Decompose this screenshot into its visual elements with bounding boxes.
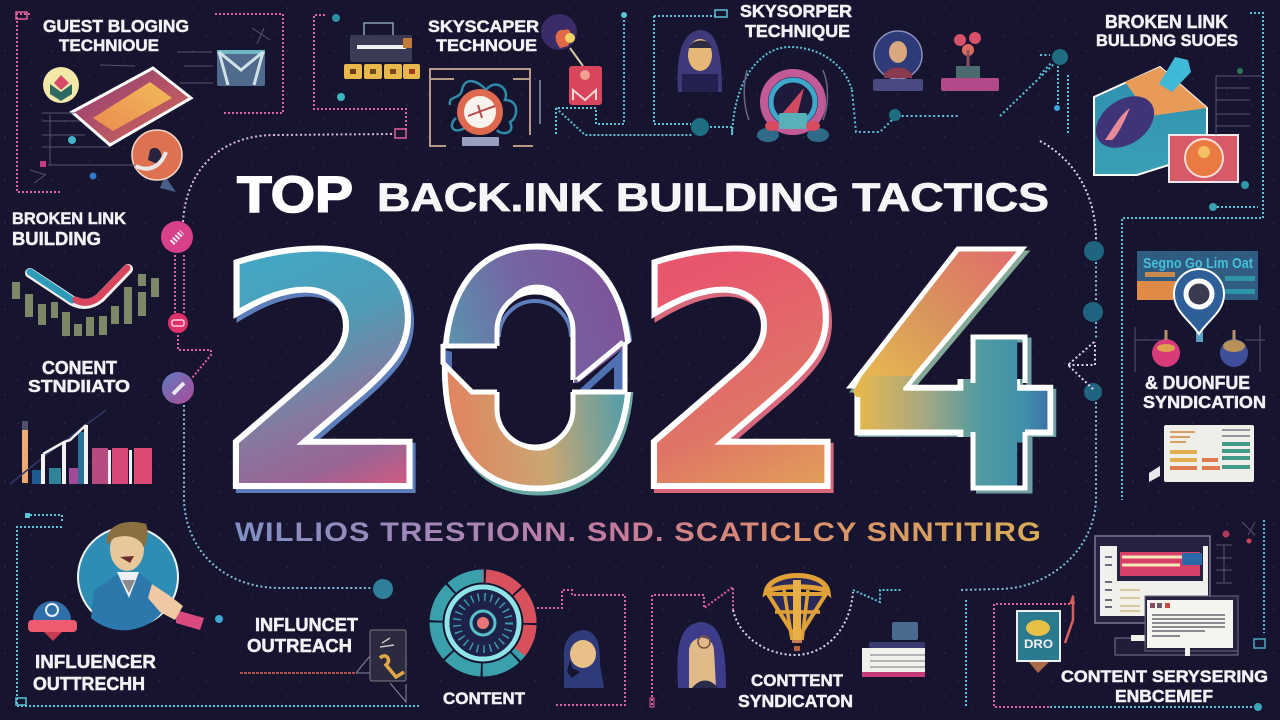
icon: front monitor — [1115, 596, 1238, 656]
bracket line — [1122, 13, 1263, 500]
heading: broken link building suoes: BULLDNG SUOES — [1096, 32, 1238, 50]
heading: conent stndiiato — [28, 358, 130, 396]
small node markers — [40, 14, 345, 180]
node: pink circles — [161, 221, 211, 378]
bracket line — [537, 590, 625, 705]
swoosh line — [30, 268, 128, 304]
icon: gauge — [744, 70, 829, 142]
heading: skysorper technique: SKYSORPER — [740, 1, 852, 21]
icon: sign board: Segno Go Lim Oat — [1143, 255, 1253, 272]
heading: conttent syndicaton: CONTTENT — [751, 671, 844, 690]
digit 2: 2 — [213, 194, 441, 566]
icon: typewriter — [344, 23, 420, 79]
bracket line to frame — [314, 15, 406, 138]
icon: 3D box — [1086, 57, 1207, 175]
icon: hand and cuff — [148, 584, 223, 630]
digit 4 — [846, 246, 1056, 494]
icon: envelope — [217, 50, 265, 86]
bar chart — [10, 410, 152, 484]
icon: two ornaments — [1152, 330, 1248, 367]
digit 4: 4 — [843, 173, 1065, 554]
panel: skysorper technique — [678, 1, 999, 142]
heading: skysorper technique: TECHNIQUE — [745, 21, 850, 41]
icon: magnifier circle — [132, 130, 182, 192]
candle bars — [12, 274, 159, 336]
heading: duonfue syndication — [1143, 373, 1266, 412]
icon: sign board — [1137, 251, 1258, 300]
heading: broken link building suoes: BROKEN LINK — [1105, 12, 1228, 32]
icon: location pin — [1174, 269, 1224, 342]
icon: red badge tile — [1169, 135, 1238, 182]
heading: broken link building: BUILDING — [12, 229, 101, 249]
heading: conent stndiiato: CONENT — [42, 358, 117, 378]
panel: syndication right — [1135, 251, 1266, 482]
icon: orb and picture tile — [541, 14, 602, 105]
guest blogging bracket lines — [16, 12, 283, 192]
panel: content serysering — [966, 520, 1268, 711]
node: purple circle — [162, 372, 194, 404]
heading: guest blogging technique: GUEST BLOGING — [43, 16, 189, 36]
icon: golden balloon — [766, 576, 828, 651]
heading: skyscaper technoue — [428, 17, 539, 55]
heading: guest blogging technique — [43, 16, 189, 55]
panel: influencer outreach — [16, 513, 420, 706]
panel: broken link building suoes — [1086, 12, 1263, 500]
digit 4: 4 — [846, 177, 1068, 558]
icon: potted plant — [941, 32, 999, 91]
small marks — [1216, 522, 1255, 583]
icon: woman portrait — [564, 630, 604, 688]
digit 2 red: 2 — [628, 190, 856, 562]
heading: influencer outtrech — [33, 651, 156, 694]
panel: content syndication bottom — [650, 576, 925, 711]
panel: content wheel — [436, 576, 625, 708]
icon: location badge — [28, 601, 77, 641]
subtitle: WILLIOS TRESTIONN. SND. SCATICLCY SNNTITIRG — [235, 517, 1042, 547]
title word: TOP: TOP — [237, 166, 353, 223]
icon: back monitor — [1095, 536, 1210, 623]
heading: conttent syndicaton — [738, 671, 853, 711]
icon: avatar — [78, 522, 178, 630]
icon: framed network globe — [430, 69, 540, 146]
heading: duonfue syndication: SYNDICATION — [1143, 392, 1266, 412]
heading: broken link building — [12, 209, 127, 249]
panel: skyscaper technique — [314, 14, 602, 146]
heading: broken link building suoes — [1096, 12, 1238, 50]
connector nodes right — [1040, 49, 1104, 401]
digit 0: 0 — [430, 188, 644, 560]
connector lines top centre — [556, 10, 1058, 136]
icon: DRO tile: DRO — [1024, 637, 1053, 651]
heading: influencer outtrech: INFLUENCER — [35, 651, 156, 672]
digit 0: 0 — [432, 192, 646, 564]
icon: DRO tile — [1017, 594, 1075, 673]
icon: tilted card — [72, 68, 191, 145]
panel: guest blogging — [16, 12, 345, 192]
digit 0: 0 — [432, 192, 646, 564]
node: teal circle — [373, 579, 393, 599]
bracket line — [16, 513, 420, 706]
heading: influncet outreach — [247, 614, 359, 656]
big year 2024 — [232, 244, 1056, 496]
icon: content wheel — [436, 576, 530, 670]
title words: backlink building tactics: BACK.INK BUILDING TACTICS — [377, 176, 1049, 220]
heading: skysorper technique — [740, 1, 852, 41]
central dashed frame — [183, 134, 1096, 590]
heading: influncet outreach: OUTREACH — [247, 635, 352, 656]
bracket lines — [966, 520, 1265, 711]
digit 0 — [440, 244, 634, 496]
heading: content: CONTENT — [443, 689, 526, 708]
heading: conttent syndicaton: SYNDICATON — [738, 691, 853, 711]
icon: yellow badge — [43, 67, 79, 103]
heading: conent stndiiato: STNDIIATO — [28, 376, 130, 396]
icon: dark tile — [240, 630, 406, 702]
digit 4: 4 — [843, 183, 1065, 564]
heading: skyscaper technoue: TECHNOUE — [436, 36, 537, 55]
digit 2 red: 2 — [631, 194, 859, 566]
heading: influencer outtrech: OUTTRECHH — [33, 674, 145, 694]
icon: book stack — [862, 622, 925, 677]
bracket line — [650, 587, 902, 707]
heading: skyscaper technoue: SKYSCAPER — [428, 17, 539, 36]
digit 2: 2 — [210, 190, 438, 562]
title — [237, 166, 1049, 223]
icon: hooded person — [678, 30, 722, 92]
heading: content serysering enbcemef — [1061, 667, 1268, 706]
icon: portrait globe — [873, 31, 923, 91]
icon: hair portrait — [677, 622, 726, 688]
heading: content serysering enbcemef: ENBCEMEF — [1115, 686, 1213, 706]
heading: content serysering enbcemef: CONTENT SERYSERING — [1061, 667, 1268, 686]
panel: broken link building left — [10, 209, 211, 484]
heading: broken link building: BROKEN LINK — [12, 209, 127, 228]
heading: duonfue syndication: & DUONFUE — [1145, 373, 1250, 393]
heading: influncet outreach: INFLUNCET — [255, 614, 359, 635]
icon: data document — [1149, 425, 1254, 482]
heading: guest blogging technique: TECHNIOUE — [59, 36, 159, 55]
digit 0: 0 — [430, 188, 644, 560]
